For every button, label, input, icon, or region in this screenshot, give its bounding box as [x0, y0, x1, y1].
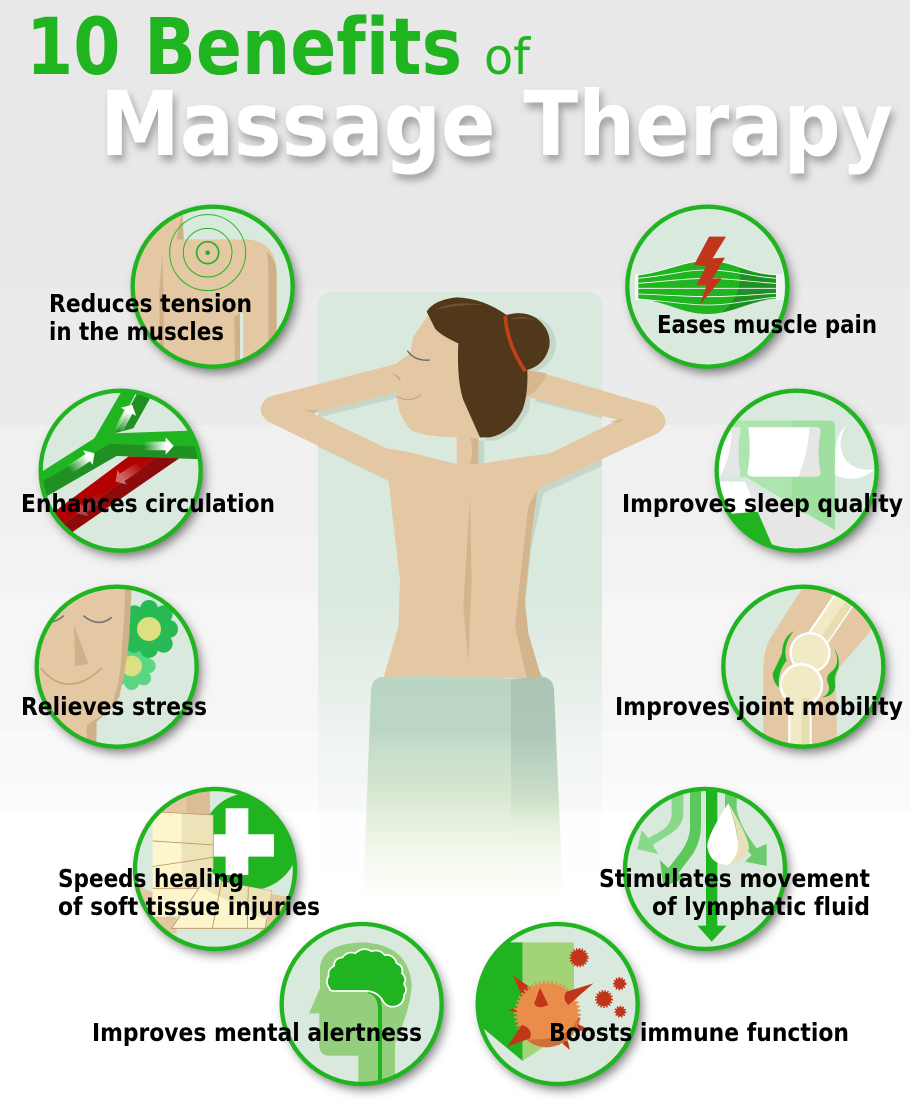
- label: in the muscles: [49, 317, 224, 346]
- label: [58, 864, 320, 921]
- label: [49, 289, 252, 346]
- icon: shoulder with tension rings: [127, 203, 293, 377]
- nose shading: [392, 372, 401, 382]
- panel: enhances circulation: [21, 388, 275, 551]
- panel: stimulates movement of lymphatic fluid: [599, 787, 870, 949]
- hair band: [505, 316, 525, 371]
- heading: 10 Benefits of: of: [484, 28, 531, 86]
- icon: lymph flow arrows and droplet: [625, 787, 785, 949]
- body shading: [303, 409, 625, 678]
- label: of soft tissue injuries: [58, 892, 320, 921]
- label: Improves mental alertness: [92, 1018, 422, 1047]
- panel: relieves stress: [21, 583, 207, 750]
- torso and arms: [261, 363, 665, 678]
- body shadow: [318, 316, 602, 677]
- icon: immune cell attacking viruses: [470, 924, 638, 1084]
- label: of lymphatic fluid: [652, 892, 870, 921]
- face: [397, 300, 503, 438]
- towel: [363, 676, 563, 897]
- massage table with woman: [261, 292, 671, 902]
- label: Relieves stress: [21, 692, 207, 721]
- panel: improves sleep quality: [622, 391, 903, 553]
- table: [318, 292, 602, 902]
- icon: muscle with lightning bolt: [627, 207, 787, 367]
- panel: eases muscle pain: [627, 207, 877, 367]
- label: Stimulates movement: [599, 864, 870, 893]
- hair: [427, 297, 550, 437]
- icon: head with brain: [282, 924, 442, 1087]
- panel: speeds healing of soft tissue injuries: [58, 787, 320, 949]
- label: [599, 864, 870, 921]
- shaded nape: [527, 370, 547, 397]
- panel: boosts immune function: [470, 924, 849, 1084]
- heading: 10 Benefits of: 10 Benefits: [26, 3, 462, 93]
- label: Eases muscle pain: [657, 310, 877, 339]
- icon: knee joint: [723, 587, 887, 750]
- icon: blood vessels: [37, 388, 203, 551]
- smile: [397, 395, 421, 400]
- icon: relaxed face with flowers: [33, 583, 197, 750]
- panel: reduces tension in the muscles: [49, 203, 293, 377]
- eye: [407, 351, 430, 360]
- label: Reduces tension: [49, 289, 252, 318]
- hair highlight: [435, 303, 537, 321]
- panel: improves joint mobility: [615, 587, 903, 750]
- label: Speeds healing: [58, 864, 244, 893]
- label: Enhances circulation: [21, 489, 275, 518]
- icon: bandaged limb with medical cross: [135, 787, 299, 949]
- title: [26, 3, 893, 176]
- icon: bed with pillow and moon: [713, 391, 877, 553]
- label: Boosts immune function: [549, 1018, 849, 1047]
- panel: improves mental alertness: [92, 924, 442, 1087]
- woman figure: [261, 297, 665, 678]
